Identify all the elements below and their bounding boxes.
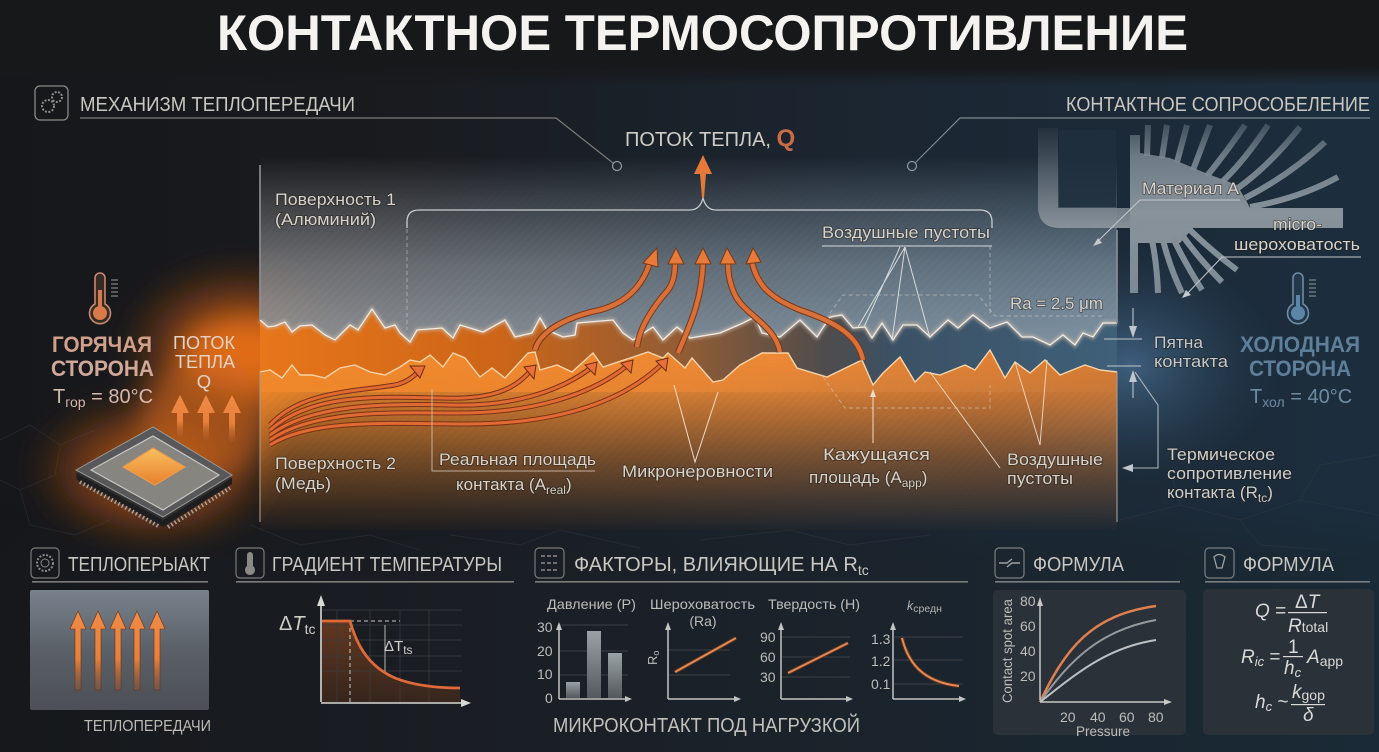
label: apparent area: ): [922, 468, 927, 487]
curves chart: 40: [1020, 643, 1036, 659]
label: apparent area: app: [902, 476, 922, 490]
line chart: roughness: Шероховатость: [650, 596, 755, 612]
curves chart: 60: [1020, 618, 1036, 634]
panel: contact area chart: [993, 548, 1186, 739]
icon: cold thermometer: [1288, 273, 1316, 324]
label: air voids bottom: пустоты: [1007, 469, 1073, 488]
curves chart: Pressure: [1076, 723, 1130, 739]
icon: hot thermometer: [89, 273, 118, 324]
dashed apparent contact box: [407, 222, 1105, 408]
formula: heat flow: ΔT: [1295, 592, 1321, 613]
formula: conductance: c: [1266, 699, 1273, 714]
line chart: hardness: [760, 596, 860, 702]
label: cold side: хол: [1262, 394, 1285, 410]
panel: heat transfer tile: [30, 548, 211, 735]
heat flow lines through copper: [270, 358, 668, 445]
label: apparent area: площадь (A: [809, 468, 902, 487]
panel: factors: tc: [858, 562, 869, 578]
label: real contact area: ): [566, 475, 572, 494]
panel: factors: МИКРОКОНТАКТ ПОД НАГРУЗКОЙ: [553, 713, 860, 737]
line chart: medium conductivity: 1.2: [871, 653, 891, 669]
panel: formulas: [1203, 548, 1374, 735]
panel: heat transfer tile: ТЕПЛОПЕРЫАКТ: [68, 554, 210, 576]
label: cold side: ХОЛОДНАЯ: [1240, 332, 1360, 357]
line chart: roughness: o: [651, 651, 661, 656]
label: heat flow left: ТЕПЛА: [175, 351, 236, 372]
label: real contact area: real: [546, 483, 566, 497]
panel: surface 2 copper: [260, 350, 1117, 530]
line chart: temperature drop: ΔT: [279, 613, 305, 635]
curves chart: 20: [1060, 709, 1076, 725]
heading: contact resistance: [908, 94, 1370, 170]
callout: thermal contact resistance: tc: [1258, 491, 1267, 505]
formula: contact resistance: A: [1307, 647, 1320, 668]
left heat glow: [30, 260, 360, 548]
label: material A: [1093, 179, 1240, 246]
panel: surface 1 aluminium: [260, 155, 1117, 345]
label: hot side: T: [53, 386, 65, 408]
label: heat flow left: ПОТОК: [173, 332, 235, 353]
label: air voids top: [822, 223, 992, 340]
panel: contact area chart: ФОРМУЛА: [1033, 554, 1125, 576]
label: roughness value: Ra = 2.5 μm: [1010, 294, 1103, 313]
callout: thermal contact resistance: [1122, 372, 1292, 505]
label: air voids top: Воздушные пустоты: [822, 223, 990, 242]
label: micro roughness right: шероховатость: [1234, 235, 1360, 254]
bar chart: pressure: 0: [545, 690, 553, 706]
callout: thermal contact resistance: контакта (R: [1167, 483, 1258, 502]
dimension: contact spots: контакта: [1154, 352, 1229, 371]
label: hot side: = 80°C: [86, 386, 153, 408]
icon: heat sink material A: [1038, 125, 1343, 293]
label: surface 2: Поверхность 2: [275, 454, 396, 473]
label: apparent area: Кажущаяся: [823, 445, 930, 464]
line chart: hardness: 90: [760, 629, 776, 645]
bar chart: pressure: Давление (P): [547, 596, 636, 612]
formula: contact resistance: 1: [1288, 637, 1299, 658]
title: КОНТАКТНОЕ ТЕРМОСОПРОТИВЛЕНИЕ: [217, 5, 1188, 61]
heat flow arrows rising through aluminium: [535, 248, 863, 360]
formula: conductance: ~: [1272, 692, 1288, 713]
label: air voids bottom: [930, 360, 1103, 488]
label: apparent area: [809, 389, 930, 490]
right cold glow: [980, 245, 1280, 485]
label: micro roughness: [622, 385, 773, 481]
label: cold side: = 40°C: [1285, 386, 1352, 408]
background: [416, 72, 1379, 752]
panel: factors: ФАКТОРЫ, ВЛИЯЮЩИЕ НА R: [574, 554, 858, 576]
label: micro roughness: Микронеровности: [622, 462, 773, 481]
brace: apparent surface: [407, 198, 992, 228]
bar chart: pressure: 10: [537, 666, 553, 682]
curves chart: 40: [1090, 709, 1106, 725]
formula: conductance: [1255, 682, 1325, 726]
formula: contact resistance: R: [1241, 647, 1255, 668]
curves chart: 60: [1119, 709, 1135, 725]
heading: heat transfer mechanism: [35, 86, 622, 170]
label: cold side: СТОРОНА: [1249, 356, 1351, 381]
panel: formulas: ФОРМУЛА: [1243, 554, 1335, 576]
bar chart: pressure: 30: [537, 619, 553, 635]
panel: temperature gradient: [236, 548, 514, 707]
panel: heat transfer tile: ТЕПЛОПЕРЕДАЧИ: [84, 718, 211, 735]
formula: contact resistance: app: [1320, 653, 1343, 669]
arrows: heat from chip: [171, 395, 241, 442]
label: material A: Материал А: [1142, 179, 1240, 198]
gap between surfaces: [260, 309, 1117, 392]
formula: contact resistance: =: [1264, 647, 1280, 668]
callout: thermal contact resistance: сопротивление: [1167, 464, 1292, 483]
line chart: temperature drop: ts: [403, 643, 413, 657]
label: hot side: [51, 332, 154, 410]
line chart: hardness: 60: [760, 649, 776, 665]
arrow: total heat flow: [694, 155, 712, 198]
formula: conductance: h: [1255, 692, 1266, 713]
label: micro roughness right: micro-: [1273, 215, 1322, 234]
callout: thermal contact resistance: Термическое: [1167, 445, 1275, 464]
formula: contact resistance: c: [1295, 665, 1302, 680]
line chart: roughness: (Ra): [689, 613, 717, 629]
label: surface 1: [275, 190, 396, 229]
label: real contact area: Реальная площадь: [439, 450, 596, 469]
panel: factors: [535, 548, 968, 737]
label: surface 2: (Медь): [275, 474, 331, 493]
formula: conductance: gop: [1302, 687, 1325, 703]
formula: contact resistance: h: [1284, 658, 1295, 679]
label: heat flow left: Q: [197, 371, 211, 392]
line chart: medium conductivity: средн: [913, 603, 942, 615]
line chart: hardness: Твердость (Н): [768, 596, 860, 612]
label: cold side: T: [1250, 386, 1262, 408]
line chart: roughness: [645, 596, 755, 702]
curves chart: 80: [1020, 593, 1036, 609]
line chart: temperature drop: ΔT: [384, 638, 403, 655]
curves chart: [999, 593, 1172, 739]
label: surface 1: (Алюминий): [275, 210, 376, 229]
callout: thermal contact resistance: ): [1267, 483, 1273, 502]
label: air voids bottom: Воздушные: [1007, 450, 1103, 469]
label: surface 2: [275, 454, 396, 493]
five heat arrows: [70, 611, 165, 690]
formula: heat flow: Rtotal: [1288, 616, 1328, 637]
bar chart: pressure: 20: [537, 643, 553, 659]
formula: heat flow: [1255, 592, 1328, 637]
formula: conductance: δ: [1303, 705, 1314, 726]
bar chart: pressure: [537, 596, 636, 706]
line chart: medium conductivity: 1.3: [871, 631, 891, 647]
curves chart: Contact spot area: [999, 599, 1015, 703]
label: real contact area: [432, 389, 596, 497]
dimension: contact spots: Пятна: [1154, 333, 1204, 352]
line chart: medium conductivity: k: [907, 599, 914, 613]
line chart: hardness: 30: [760, 669, 776, 685]
heat flow Q label: ПОТОК ТЕПЛА, Q: [625, 125, 795, 152]
formula: contact resistance: [1241, 637, 1343, 680]
label: micro roughness right: [1182, 215, 1361, 298]
label: hot side: гор: [65, 394, 86, 410]
curves chart: 80: [1148, 709, 1164, 725]
label: cold side: [1240, 332, 1360, 410]
line chart: roughness: R: [645, 656, 660, 665]
label: heat flow left: [173, 332, 236, 392]
panel: temperature gradient: ГРАДИЕНТ ТЕМПЕРАТУРЫ: [272, 554, 502, 576]
line chart: temperature drop: [279, 595, 471, 707]
label: real contact area: контакта (A: [456, 475, 546, 494]
formula: conductance: k: [1292, 682, 1302, 703]
line chart: temperature drop: tc: [305, 621, 315, 637]
label: hot side: СТОРОНА: [51, 356, 154, 381]
dimension: contact spots: [1104, 308, 1229, 398]
formula: heat flow: Q =: [1255, 601, 1286, 622]
icon: processor chip: [76, 427, 232, 527]
heading: heat transfer mechanism: МЕХАНИЗМ ТЕПЛОПЕРЕДАЧИ: [80, 94, 355, 116]
hexagon texture: [0, 425, 1379, 550]
line chart: medium conductivity: 0.1: [871, 676, 891, 692]
label: surface 1: Поверхность 1: [275, 190, 396, 209]
curves chart: 20: [1020, 668, 1036, 684]
label: hot side: ГОРЯЧАЯ: [52, 332, 152, 357]
formula: contact resistance: ic: [1255, 654, 1265, 669]
line chart: medium conductivity: [871, 599, 966, 702]
